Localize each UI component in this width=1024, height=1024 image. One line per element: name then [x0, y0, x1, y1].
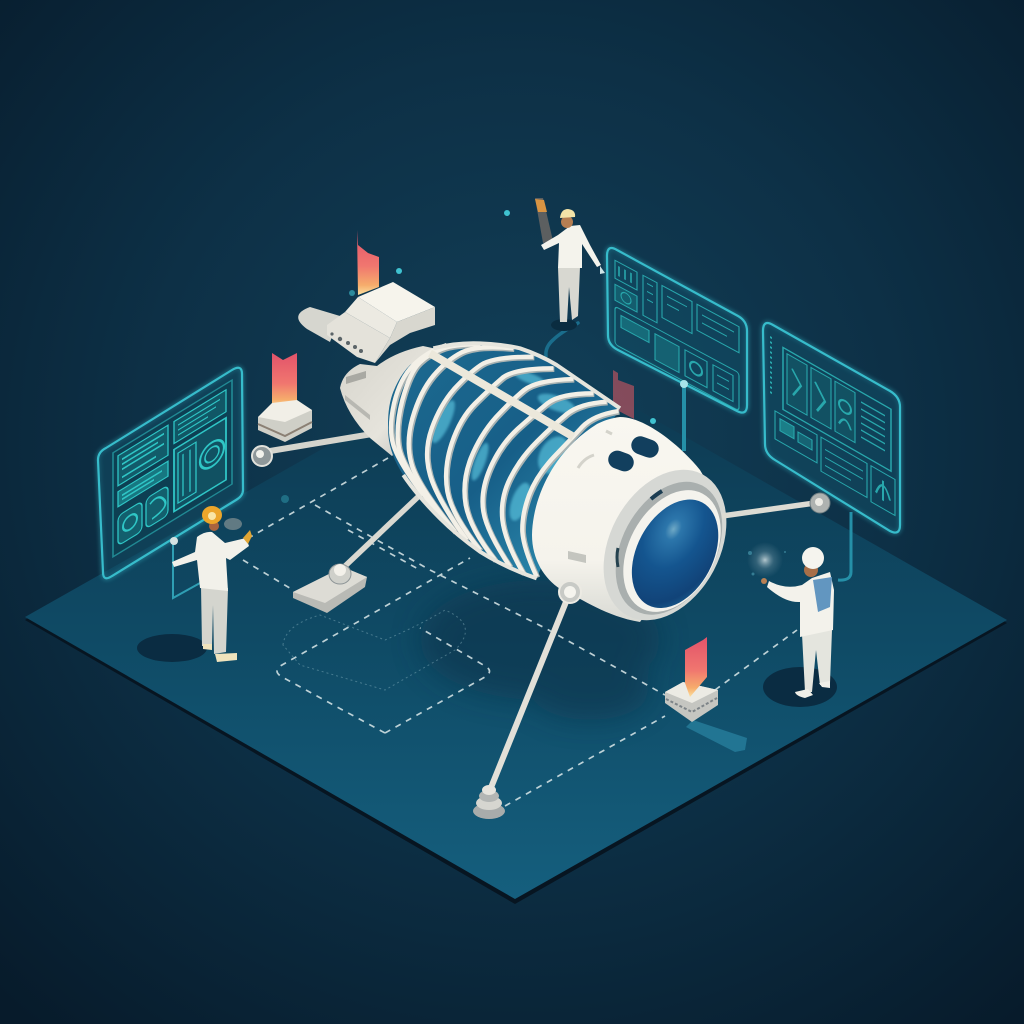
shoes: [795, 689, 813, 698]
lens ring: [579, 449, 751, 641]
strut: right arm: [722, 493, 830, 516]
rear flame banner: [613, 370, 634, 419]
top person curl: [546, 323, 578, 356]
ribs: [391, 344, 618, 577]
sparks: [747, 542, 783, 578]
hull vent: [568, 551, 586, 563]
rib shadows: [392, 345, 619, 578]
screen contents: [615, 260, 739, 411]
flame banner top: [357, 230, 379, 295]
module ports: [330, 332, 363, 353]
upper engine module: [298, 230, 435, 363]
ring slots: [617, 548, 618, 567]
nozzle: [298, 307, 340, 342]
smoke: [224, 518, 242, 530]
screen contents: [113, 380, 232, 557]
legs: [802, 630, 832, 692]
glass reflections: [427, 368, 578, 523]
strut: lower left arm with foot plate: [293, 495, 420, 613]
accent dots: [281, 210, 656, 512]
backpack: [813, 577, 832, 612]
panel: far right holographic screen: [763, 323, 900, 533]
left screen post: [170, 537, 200, 598]
person: engineer at left: [137, 506, 252, 662]
cage glass: [388, 343, 620, 578]
cage rims: [403, 343, 620, 578]
tool held: [535, 198, 553, 243]
strut: left arm: [252, 434, 372, 466]
person: engineer at top: [535, 198, 605, 331]
longitudinal band: [430, 353, 573, 437]
rear fuselage: [340, 346, 437, 456]
upper right screen post: [680, 380, 688, 451]
tool: [243, 530, 252, 544]
legs: [558, 267, 580, 322]
floor platform: [25, 340, 1007, 904]
hull floor shadow: [420, 580, 660, 720]
hull windows: [606, 434, 661, 474]
shoes: [215, 653, 237, 662]
torso and arms: [541, 225, 601, 268]
torso and arms: [172, 532, 249, 591]
faint floor outline: [283, 610, 465, 690]
cage and ribs: [388, 343, 620, 578]
lower flame pedestal: [665, 637, 747, 752]
spacecraft hull: [388, 343, 751, 641]
panel: upper right holographic screen: [607, 248, 747, 413]
hull dents: [578, 455, 594, 468]
module body: [358, 282, 435, 322]
screen contents: [771, 337, 895, 516]
far right screen post: [838, 512, 851, 580]
panel: left holographic screen: [98, 368, 243, 578]
left flame pedestal: [258, 353, 312, 442]
dashed floor guides: [243, 458, 797, 806]
strut: front leg with foot: [473, 581, 581, 819]
nose cap: [532, 417, 722, 622]
legs: [201, 586, 228, 654]
torso and arms: [767, 572, 834, 637]
lens: [614, 485, 736, 623]
person: engineer at right: [747, 542, 837, 707]
